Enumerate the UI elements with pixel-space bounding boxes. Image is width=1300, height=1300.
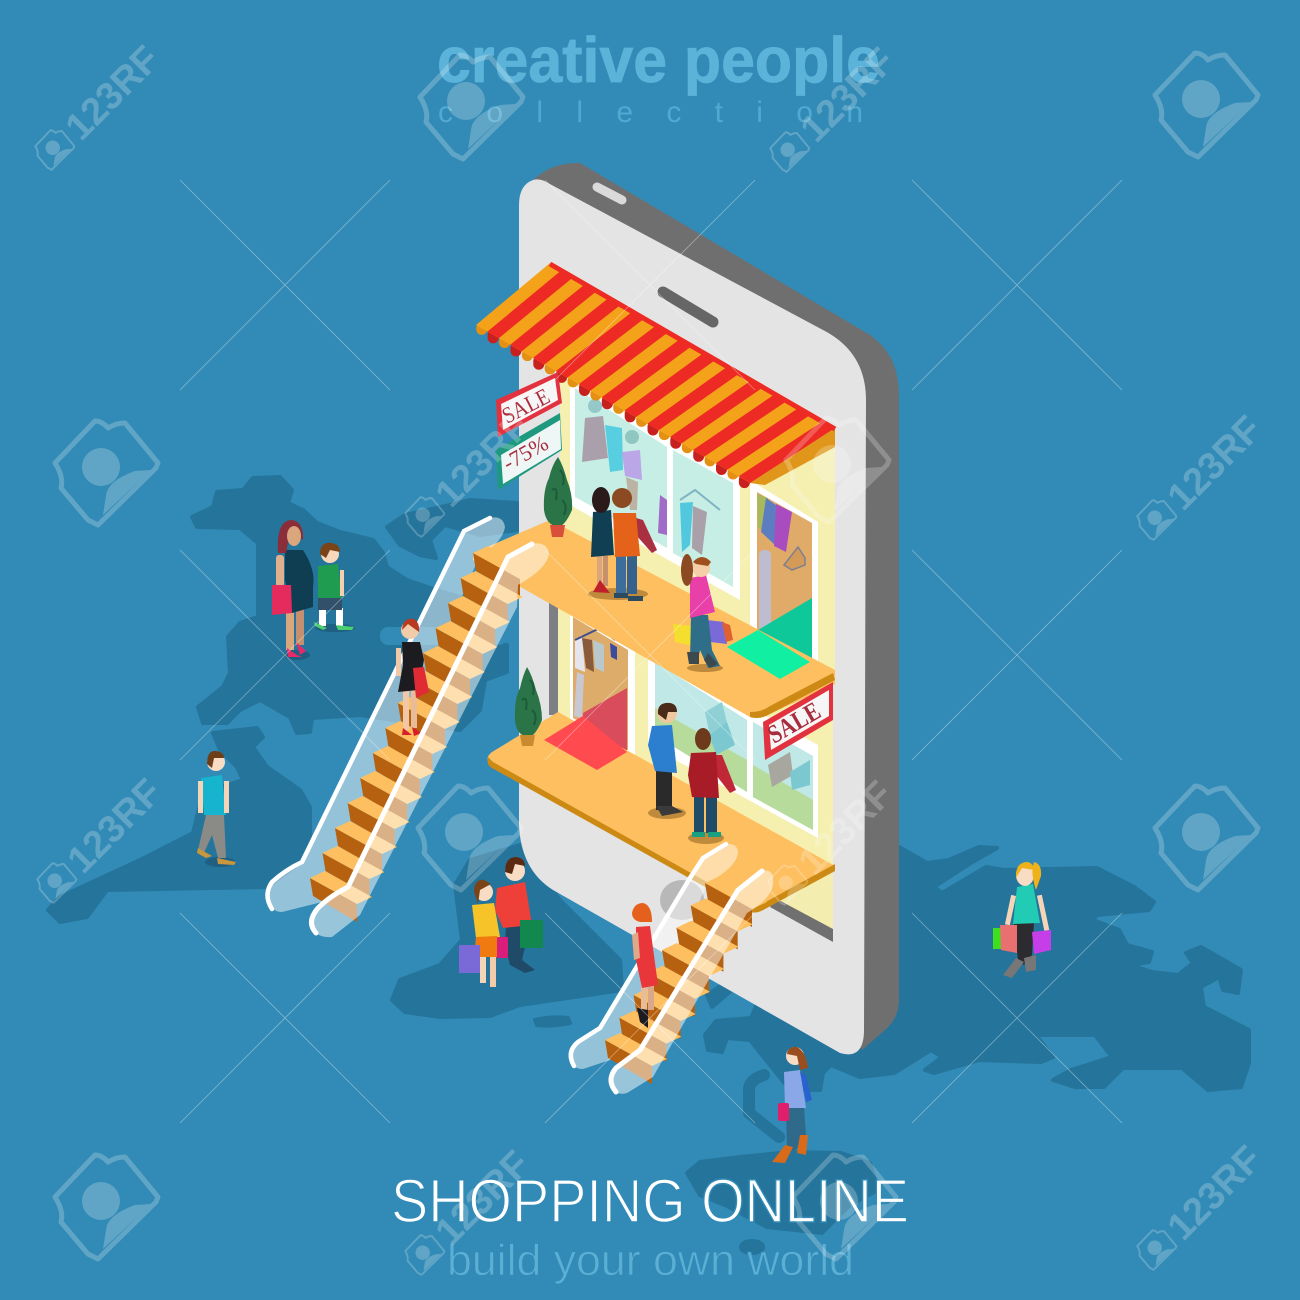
brand title: creative people: [437, 24, 880, 96]
upper door frame: [750, 480, 818, 670]
steps: [310, 546, 535, 922]
awning: [476, 263, 835, 485]
watermarks: 123RF: [428, 1143, 538, 1254]
watermarks: 123RF: [793, 40, 903, 151]
lower shop: [544, 600, 833, 866]
woman: [459, 880, 500, 987]
floor edge: [488, 757, 835, 913]
discount sign: [496, 413, 562, 490]
men at lower window: [648, 703, 736, 844]
phone: [519, 163, 899, 1054]
phone top button: [597, 187, 622, 200]
front rail: [611, 871, 762, 1092]
lower door frame: [570, 610, 635, 760]
couple walking with bags: [459, 857, 543, 987]
pregnant woman and child: [272, 520, 355, 660]
world map shadow: [48, 477, 1249, 1253]
lower door clothes: [574, 628, 617, 718]
upper floor: [473, 520, 835, 718]
floor slab: [487, 712, 835, 906]
front glass: [611, 871, 773, 1094]
watermarks: 123RF: [1160, 1138, 1270, 1249]
upper shop: [560, 370, 835, 672]
woman in red dress: [632, 903, 658, 1028]
mannequins: [582, 399, 642, 510]
man in blue: [648, 703, 686, 819]
back glass: [266, 517, 505, 912]
red mat top on lower floor: [544, 716, 627, 770]
screen bottom strip: [773, 873, 833, 941]
man walking left: [197, 751, 236, 867]
awning red stripes: [487, 270, 835, 483]
lower door red mat: [544, 688, 627, 770]
watermarks: 123RF: [791, 773, 901, 884]
awning scallops orange: [482, 328, 733, 474]
steps: [605, 876, 767, 1084]
floor edge: [750, 673, 835, 718]
watermarks: 123RF: [1160, 408, 1270, 519]
screen edge: [549, 600, 559, 715]
upper wall: [560, 370, 835, 672]
lower door interior: [573, 617, 628, 750]
home button: [660, 880, 704, 920]
woman bottom center: [772, 1047, 812, 1163]
gray strip under screen: [770, 898, 833, 942]
woman right with bags: [993, 862, 1051, 978]
awning base: [476, 263, 835, 483]
lower floor: [487, 712, 835, 913]
front rail: [311, 544, 532, 933]
watermarks: 123RF: [58, 38, 168, 149]
man: [612, 488, 657, 601]
discount sign: -75%: [498, 430, 552, 475]
escalator left: [266, 517, 549, 937]
watermarks: 123RF: [428, 405, 538, 516]
plant lower: [515, 667, 542, 746]
awning scallops red: [493, 335, 744, 483]
phone body side: [533, 163, 899, 1050]
woman with bags upper: [673, 554, 733, 672]
brand subtitle: collection: [438, 96, 863, 129]
woman on escalator: [396, 619, 429, 736]
plant upper: [544, 457, 572, 537]
couple at upper window: [588, 487, 657, 601]
upper door clothes: [757, 494, 805, 632]
sale sign upper: SALE: [498, 383, 554, 428]
green mat: [727, 630, 810, 679]
phone face: [519, 179, 866, 1054]
awning ridge: [550, 264, 835, 429]
man: [495, 857, 543, 973]
light map gap: [380, 627, 507, 645]
lower window frame: [648, 650, 818, 838]
upper window frame: [570, 382, 740, 600]
subtitle: build your own world: [447, 1236, 854, 1285]
floor slab: [473, 520, 835, 718]
escalator right: [571, 844, 773, 1094]
woman: [272, 520, 314, 660]
woman: [591, 487, 614, 593]
child: [314, 543, 355, 632]
lower window panes: [655, 662, 813, 830]
upper window pane left: [575, 388, 667, 548]
back rail: [571, 844, 726, 1066]
window clothes: [658, 490, 720, 555]
back glass: [571, 844, 738, 1069]
upper door interior: [757, 492, 812, 640]
lower wall: [558, 600, 833, 866]
sale sign lower: SALE: [762, 696, 825, 749]
main title: SHOPPING ONLINE: [391, 1167, 909, 1235]
awning side: [750, 428, 835, 485]
back rail: [268, 518, 490, 909]
green mat back: [758, 598, 812, 662]
watermarks: 123RF: [60, 771, 170, 882]
front glass: [311, 543, 549, 937]
earpiece: [663, 292, 713, 322]
man in red: [688, 728, 736, 844]
upper window pane right: [673, 450, 733, 587]
